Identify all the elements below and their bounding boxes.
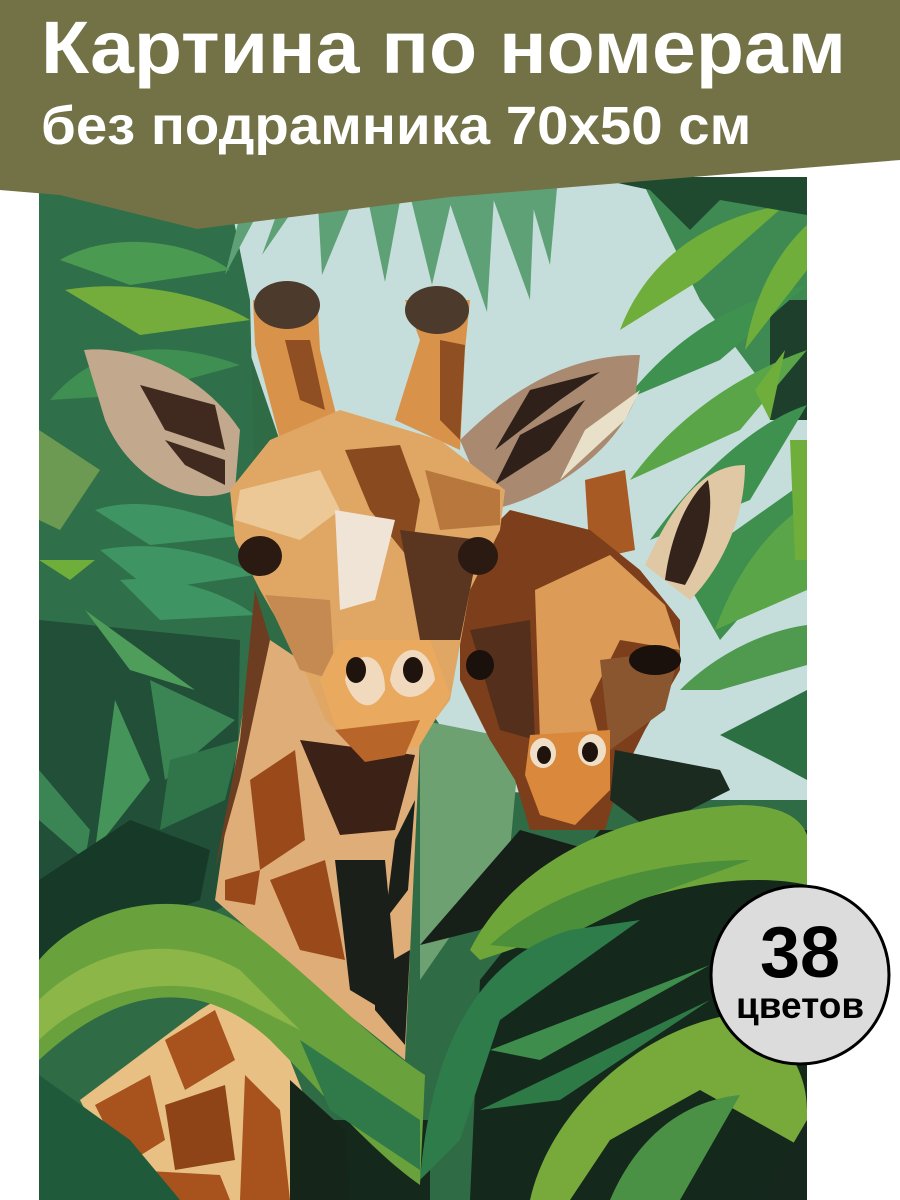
right giraffe [420, 465, 745, 945]
left foliage [39, 242, 255, 960]
right horn [585, 470, 635, 560]
muzzle [320, 640, 450, 760]
eyes [238, 536, 282, 576]
bottom right leaves [530, 1015, 807, 1200]
left giraffe [84, 281, 640, 1060]
lower giraffe body [80, 1004, 334, 1200]
top palm leaves [225, 177, 558, 312]
painting: giraffes in the jungle [39, 177, 807, 1200]
head [230, 410, 505, 760]
right palm leaves [618, 177, 807, 780]
horns [253, 300, 340, 440]
badge circle [711, 886, 889, 1064]
title: Картина по номерам [41, 6, 846, 89]
subtitle: без подрамника 70х50 см [41, 96, 751, 156]
neck [215, 630, 420, 1060]
badge label: цветов [736, 985, 864, 1026]
badge number: 38 [760, 913, 840, 993]
big curved leaf lower left [39, 904, 425, 1185]
head [460, 510, 680, 830]
header banner [0, 0, 900, 229]
big curved leaf lower right [420, 805, 807, 1180]
background foliage and sky [39, 177, 807, 1200]
ears [84, 349, 240, 496]
bottom left leaf [39, 1075, 180, 1200]
right ear [645, 465, 745, 600]
